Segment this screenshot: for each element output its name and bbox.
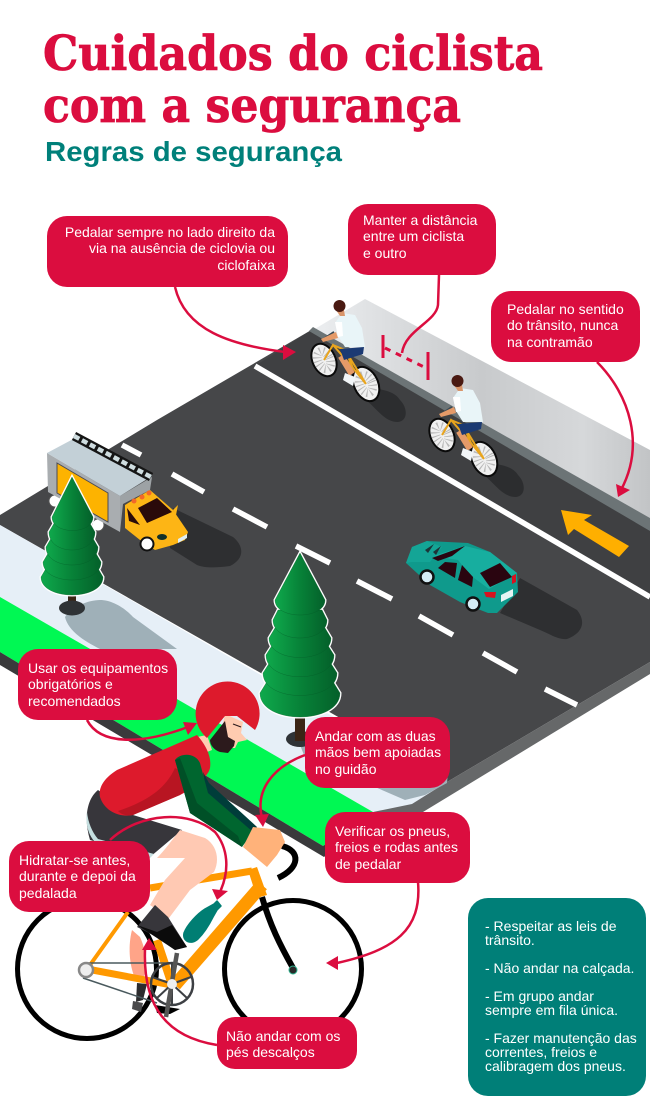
lane dashes	[122, 445, 577, 705]
callout: equipment	[18, 649, 177, 720]
beard	[210, 721, 235, 753]
panel: general rules: correntes, freios e	[485, 1044, 597, 1060]
far leg	[130, 930, 180, 1014]
callout: shoes: pés descalços	[226, 1044, 315, 1060]
callout: tyres: de pedalar	[335, 856, 402, 872]
panel: general rules: trânsito.	[485, 932, 535, 948]
shoe	[137, 905, 187, 950]
green strip	[0, 597, 373, 846]
hands	[243, 827, 285, 867]
panel: general rules: - Em grupo andar	[485, 988, 594, 1004]
callout: right side: Pedalar sempre no lado direito da	[65, 224, 275, 240]
panel: general rules: sempre em fila única.	[485, 1002, 618, 1018]
truck shadow	[170, 508, 241, 567]
panel: general rules	[468, 898, 646, 1096]
neck	[197, 735, 212, 752]
tree shadows	[65, 600, 450, 800]
callout: distance: entre um ciclista	[363, 228, 464, 244]
arrow: equipment	[87, 720, 197, 740]
callout: shoes: Não andar com os	[226, 1028, 340, 1044]
callout: equipment: Usar os equipamentos	[28, 660, 168, 676]
panel: general rules: - Não andar na calçada.	[485, 960, 634, 976]
curb	[309, 327, 650, 531]
frame	[87, 867, 267, 985]
title: Cuidados do ciclista	[43, 26, 543, 82]
callout: tyres: Verificar os pneus,	[335, 823, 450, 839]
callout: traffic direction	[491, 291, 640, 362]
callout: hydrate: Hidratar-se antes,	[19, 852, 130, 868]
truck	[47, 436, 188, 550]
road side edge	[373, 662, 650, 812]
bike lane	[255, 329, 650, 597]
big cyclist	[86, 681, 285, 950]
callout: right side: ciclofaixa	[217, 257, 275, 273]
callout: traffic direction: Pedalar no sentido	[507, 301, 624, 317]
sidewalk near	[0, 525, 447, 812]
arrow: hydrate	[110, 817, 228, 900]
direction arrow	[561, 510, 629, 557]
panel: general rules: - Respeitar as leis de	[485, 918, 617, 934]
arrow: hands	[255, 755, 305, 827]
fork	[262, 897, 293, 968]
chain	[83, 963, 170, 1003]
thigh	[150, 830, 217, 918]
chainring	[151, 953, 193, 1017]
callout: hands: Andar com as duas	[315, 728, 436, 744]
title: com a segurança	[43, 78, 461, 134]
tree right	[260, 553, 340, 747]
rear wheel	[18, 900, 156, 1038]
callout: hydrate: durante e depoi da	[19, 868, 136, 884]
car	[406, 541, 518, 613]
lane line	[255, 366, 650, 597]
callout: hydrate: pedalada	[19, 885, 77, 901]
callout: traffic direction: do trânsito, nunca	[507, 317, 619, 333]
far sidewalk	[313, 299, 650, 518]
front hub	[289, 966, 297, 974]
road	[0, 329, 650, 782]
callout: tyres: freios e rodas antes	[335, 839, 458, 855]
title	[43, 26, 543, 134]
callout: hydrate	[9, 841, 150, 912]
shorts	[87, 790, 182, 857]
eye	[233, 724, 241, 727]
callout: tyres	[325, 812, 470, 883]
callout: distance: Manter a distância	[363, 212, 478, 228]
callout: right side: via na ausência de ciclovia ou	[89, 240, 275, 256]
distance marker	[383, 335, 428, 380]
callout: hands: no guidão	[315, 761, 377, 777]
face	[218, 714, 247, 748]
callout: hands	[305, 717, 450, 788]
torso	[100, 735, 210, 816]
cyclist near	[424, 375, 524, 497]
bicycle	[18, 846, 362, 1038]
callout: hands: mãos bem apoiadas	[315, 744, 441, 760]
tree left	[41, 477, 103, 616]
arrow: traffic direction	[597, 362, 633, 497]
cyclist far	[306, 300, 406, 422]
helmet	[196, 681, 260, 738]
callout: equipment: recomendados	[28, 693, 121, 709]
arm	[175, 755, 257, 847]
callout: equipment: obrigatórios e	[28, 676, 113, 692]
callout: shoes	[217, 1017, 357, 1069]
arrow: right side of the road	[175, 287, 296, 360]
water bottle	[184, 901, 221, 942]
front wheel	[224, 900, 362, 1038]
subtitle: Regras de segurança	[45, 136, 342, 167]
arrow: distance	[402, 275, 439, 353]
illustration: street scene	[0, 299, 650, 857]
arrow: tyres	[326, 882, 418, 970]
rear cog	[79, 963, 93, 977]
base edge	[0, 652, 379, 857]
panel: general rules: calibragem dos pneus.	[485, 1058, 626, 1074]
handlebar	[278, 846, 295, 878]
panel: general rules: - Fazer manutenção das	[485, 1030, 637, 1046]
callout: distance: e outro	[363, 245, 407, 261]
callout: distance	[348, 204, 496, 275]
car shadow	[500, 578, 582, 639]
callout: traffic direction: na contramão	[507, 334, 593, 350]
callout: right side	[47, 216, 288, 287]
arrow: shoes	[142, 938, 217, 1045]
